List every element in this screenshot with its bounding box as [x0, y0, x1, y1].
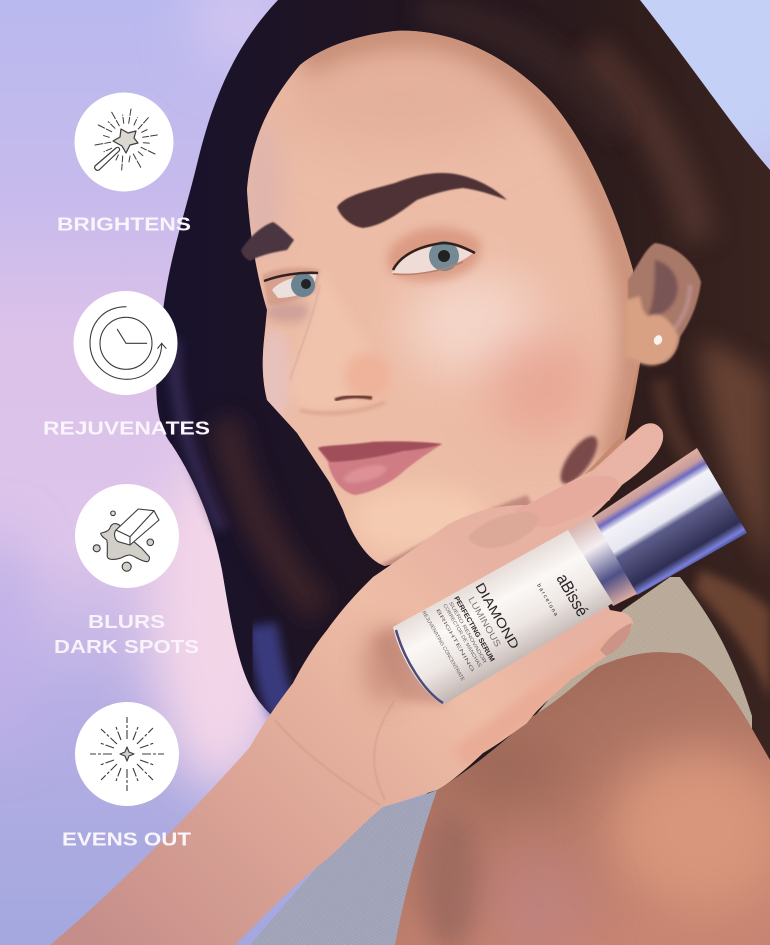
- label: brightens: BRIGHTENS: [57, 214, 191, 234]
- bottle cap: [592, 448, 747, 595]
- thumb shading: [460, 640, 625, 760]
- bottle label text: REJUVENATING CONCENTRATE: [420, 610, 466, 683]
- forehead shading: [270, 40, 530, 150]
- eyes: [262, 227, 481, 305]
- icon: magic wand with star: [95, 109, 157, 170]
- cheek highlight: [405, 275, 545, 375]
- label: rejuvenates: REJUVENATES: [43, 418, 210, 438]
- blush: [485, 335, 595, 435]
- bottle label text: [420, 570, 592, 683]
- icon circle: evens out: [75, 702, 179, 806]
- icon circle: brightens: [74, 92, 174, 192]
- arm and hand: [40, 410, 680, 945]
- bottle label text: aBissé: [553, 570, 592, 620]
- icon: eraser on stain: [93, 509, 159, 571]
- palm creases: [275, 720, 380, 805]
- ear with earring: [626, 243, 701, 365]
- chin: [350, 485, 490, 555]
- benefit: evens out: [62, 702, 191, 850]
- face: [230, 20, 650, 580]
- dress: [250, 577, 752, 945]
- neck: [400, 350, 642, 565]
- lips: [318, 442, 442, 495]
- shadow from fingers on jaw: [381, 494, 532, 566]
- bottle label text: SUERO RENOVADOR: [447, 601, 488, 665]
- icon circle: rejuvenates: [74, 291, 178, 395]
- benefit: rejuvenates: [43, 291, 210, 438]
- label: blurs dark spots: DARK SPOTS: [54, 637, 199, 657]
- bottle label text: BRIGHTENING: [434, 608, 476, 674]
- under eye shade: [264, 302, 312, 322]
- shoulder and chest: [390, 640, 770, 945]
- thumb nail: [600, 623, 632, 656]
- bottle label text: barcelona: [535, 583, 559, 619]
- icon: clock with arrow: [90, 307, 166, 379]
- label: evens out: EVENS OUT: [62, 830, 191, 850]
- bottle label text: CORRECTOR DE MANCHAS: [441, 603, 483, 669]
- palm shadow: [363, 625, 407, 705]
- index finger nail: [468, 512, 539, 548]
- icon circle: blurs dark spots: [75, 484, 179, 588]
- label: blurs dark spots: [54, 612, 199, 657]
- hair: [156, 0, 770, 800]
- bottle label text: DIAMOND: [472, 580, 522, 652]
- bottle collar: [568, 516, 637, 606]
- left cheek: [262, 330, 292, 418]
- eyebrows: [241, 173, 507, 261]
- nose: [290, 267, 392, 413]
- middle finger: [556, 476, 618, 498]
- ring finger: [626, 438, 663, 482]
- label: blurs dark spots: BLURS: [88, 612, 165, 632]
- bottle label text: PERFECTING SERUM: [452, 596, 495, 663]
- bottle body: [393, 530, 613, 705]
- bottle label text: LUMINOUS: [466, 595, 503, 648]
- benefit: brightens: [57, 92, 191, 234]
- bottle: [393, 448, 747, 705]
- icon: starburst: [90, 717, 164, 791]
- benefit: blurs dark spots: [54, 484, 199, 657]
- hairline shadow: [300, 33, 635, 470]
